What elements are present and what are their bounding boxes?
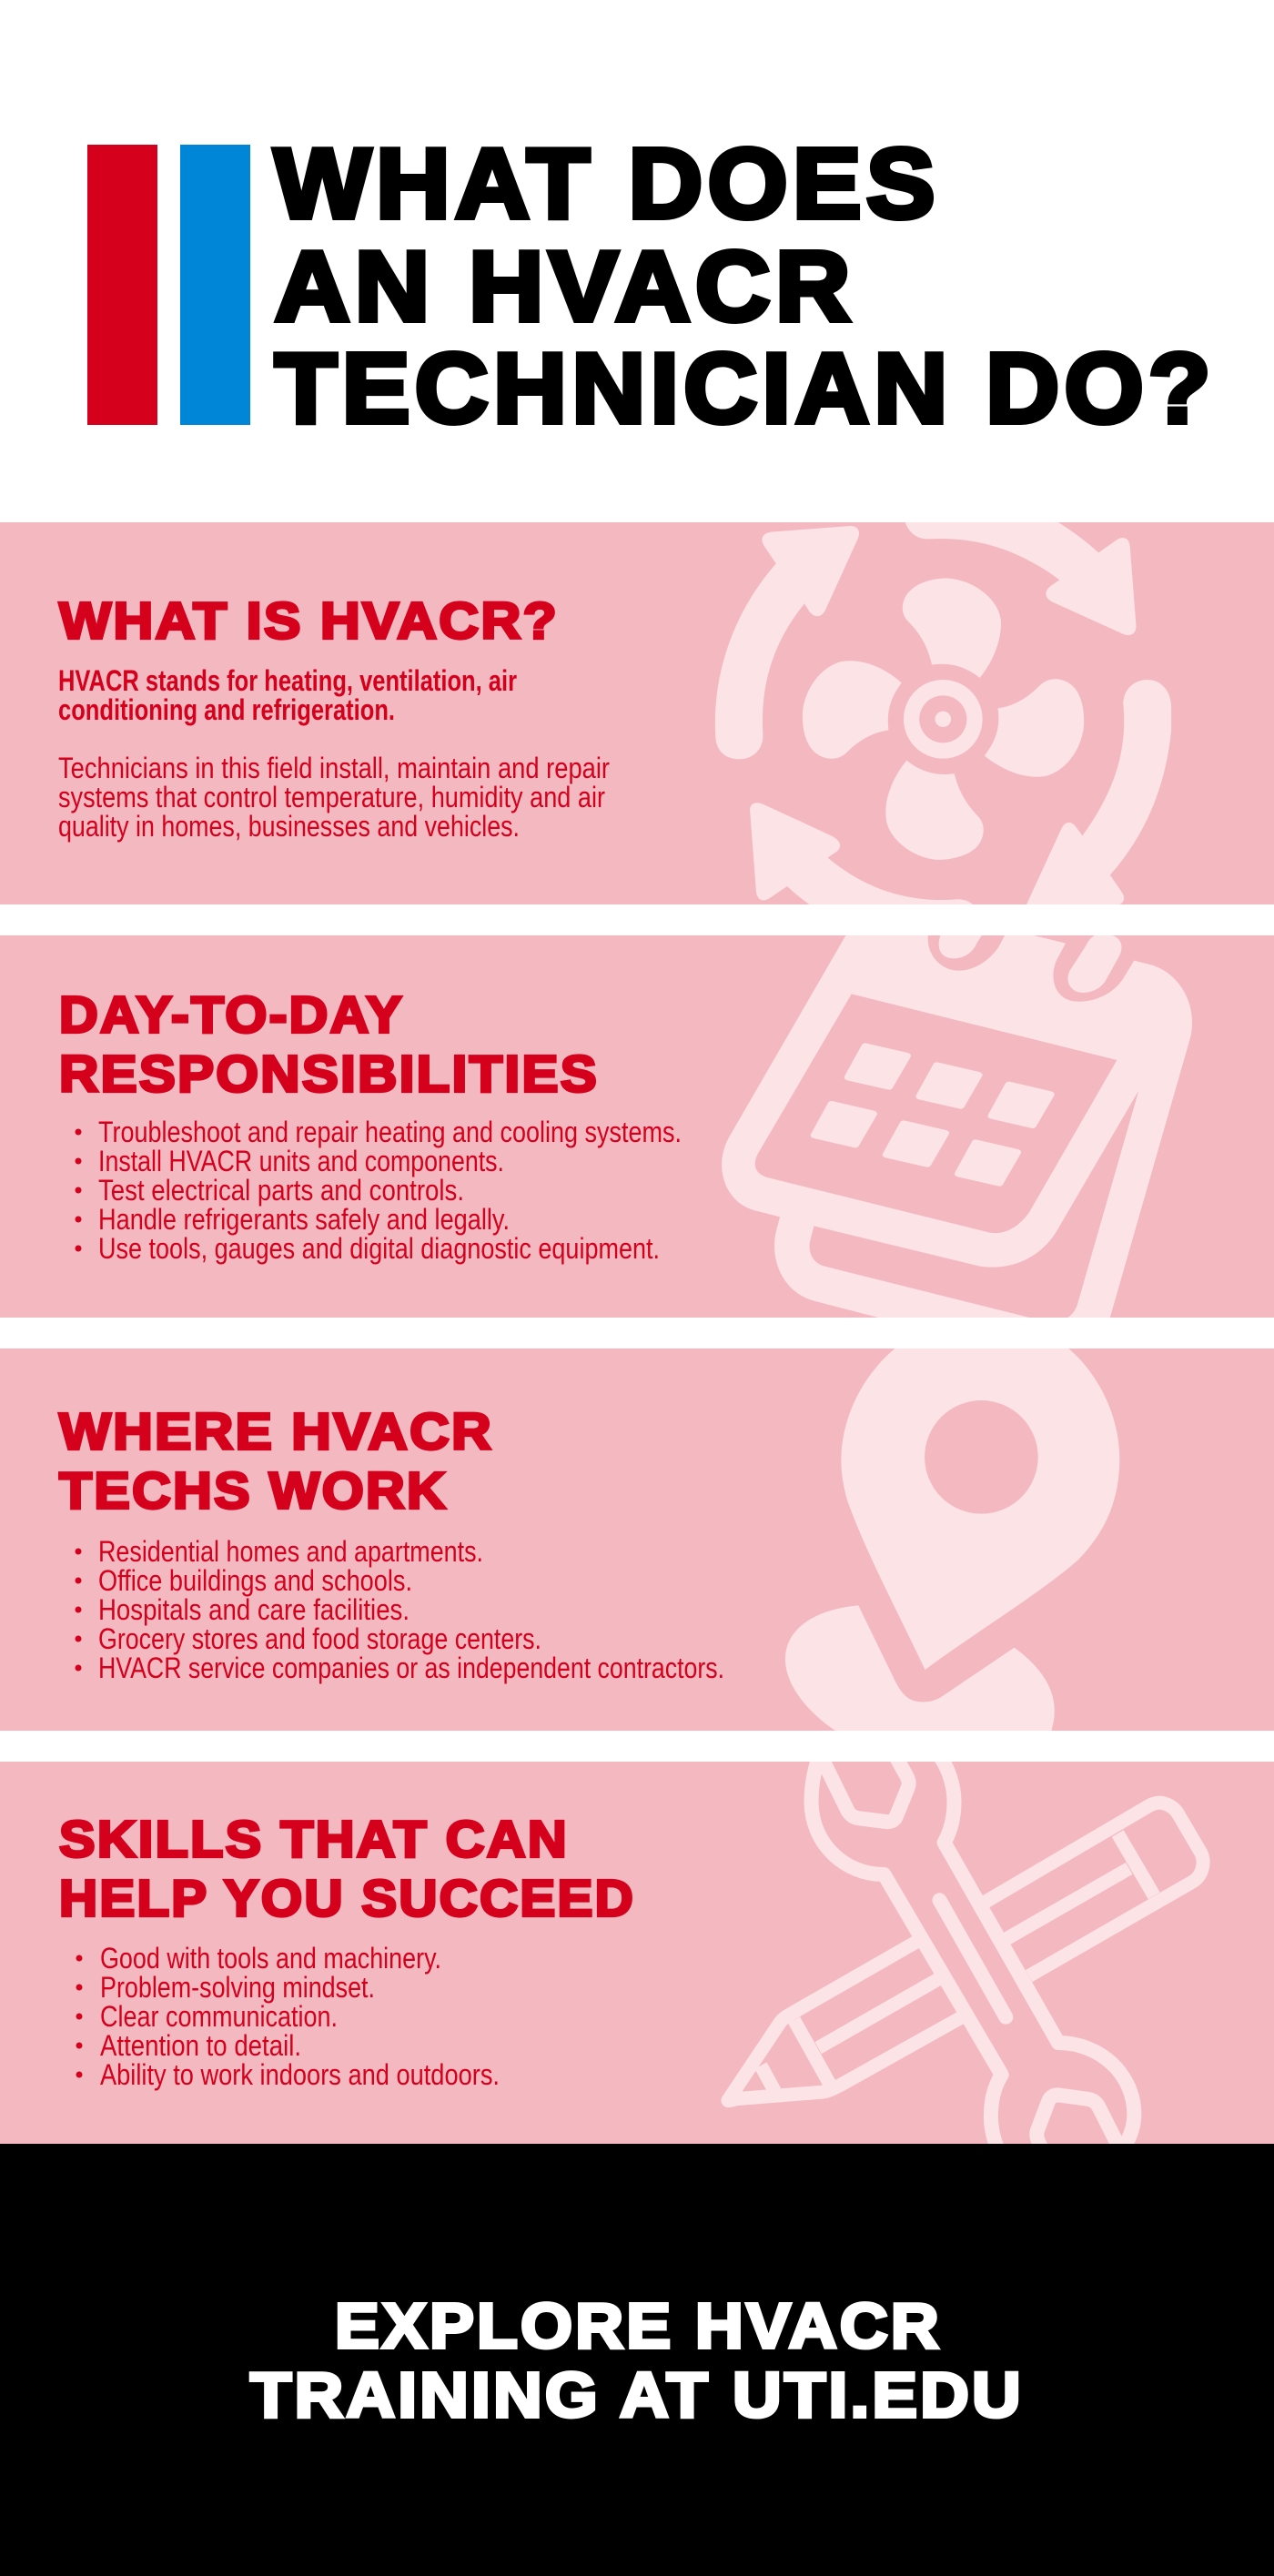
heading: day-to-day responsibilities: RESPONSIBILITIES: [59, 1045, 599, 1103]
panel: call to action: [0, 2144, 1274, 2576]
bullet list: workplaces: Residential homes and apartments.: [98, 1535, 483, 1568]
bullet list: responsibilities: Handle refrigerants safely and legally.: [98, 1203, 510, 1236]
heading: skills: HELP YOU SUCCEED: [59, 1869, 635, 1927]
bullet list: skills: Problem-solving mindset.: [100, 1971, 375, 2004]
icon: map pin: [785, 1349, 1119, 1731]
panel: skills: [0, 1753, 1274, 2150]
title: WHAT DOES: [274, 128, 940, 239]
bullet list: responsibilities: [75, 1116, 682, 1265]
heading: explore training: TRAINING AT UTI.EDU: [250, 2359, 1024, 2430]
heading: day-to-day responsibilities: [59, 986, 599, 1103]
bullet list: workplaces: Grocery stores and food storage centers.: [98, 1622, 541, 1655]
heading: where HVACR techs work: WHERE HVACR: [59, 1403, 493, 1460]
bullet list: workplaces: HVACR service companies or as independent contractors.: [98, 1652, 724, 1684]
heading: explore training: EXPLORE HVACR: [335, 2290, 942, 2361]
icon: fan with circular arrows: [715, 522, 1171, 904]
heading: skills: [59, 1811, 635, 1927]
bullet list: responsibilities: Install HVACR units and components.: [98, 1145, 504, 1177]
heading: day-to-day responsibilities: DAY-TO-DAY: [59, 986, 404, 1043]
heading: where HVACR techs work: TECHS WORK: [59, 1461, 448, 1520]
panel background: [0, 522, 1274, 904]
panel: day-to-day responsibilities: [0, 935, 1274, 1318]
icon: red bar: [87, 145, 157, 425]
bullet list: skills: Clear communication.: [100, 2000, 338, 2033]
heading: where HVACR techs work: [59, 1403, 493, 1520]
panel background: [0, 1762, 1274, 2144]
text: description: systems that control temperature, humidity and air: [58, 781, 605, 813]
panel: what is HVACR: [0, 522, 1274, 904]
panel background: [0, 935, 1274, 1318]
bullet list: skills: Good with tools and machinery.: [100, 1942, 441, 1975]
text: description: quality in homes, businesses and vehicles.: [58, 810, 520, 843]
text: definition: [58, 664, 517, 726]
heading: skills: SKILLS THAT CAN: [59, 1811, 569, 1867]
text: definition: HVACR stands for heating, ventilation, air: [58, 664, 517, 697]
bullet list: workplaces: Office buildings and schools.: [98, 1564, 412, 1597]
icon: blue bar: [180, 145, 250, 425]
header: [87, 128, 1216, 444]
bullet list: responsibilities: Use tools, gauges and digital diagnostic equipment.: [98, 1232, 660, 1265]
title: AN HVACR: [275, 231, 855, 342]
bullet list: workplaces: [75, 1535, 724, 1684]
bullet list: responsibilities: Troubleshoot and repair heating and cooling systems.: [98, 1116, 682, 1148]
heading: what is HVACR: WHAT IS HVACR?: [59, 591, 559, 650]
panel background: [0, 1349, 1274, 1731]
title: [274, 128, 1216, 444]
bullet list: skills: Attention to detail.: [100, 2029, 301, 2062]
bullet list: responsibilities: Test electrical parts and controls.: [98, 1174, 464, 1207]
bullet list: skills: [76, 1942, 500, 2091]
bullet list: workplaces: Hospitals and care facilities.: [98, 1593, 410, 1626]
text: description: [58, 752, 610, 843]
text: definition: conditioning and refrigeration.: [58, 693, 395, 726]
icon: wrench and pencil: [728, 1753, 1203, 2150]
text: description: Technicians in this field install, maintain and repair: [58, 752, 610, 784]
panel background: [0, 2144, 1274, 2576]
panel: where HVACR techs work: [0, 1349, 1274, 1731]
bullet list: skills: Ability to work indoors and outdoors.: [100, 2058, 500, 2091]
heading: explore training: [250, 2290, 1024, 2430]
title: TECHNICIAN DO?: [275, 333, 1216, 444]
icon: calendar: [722, 935, 1192, 1318]
